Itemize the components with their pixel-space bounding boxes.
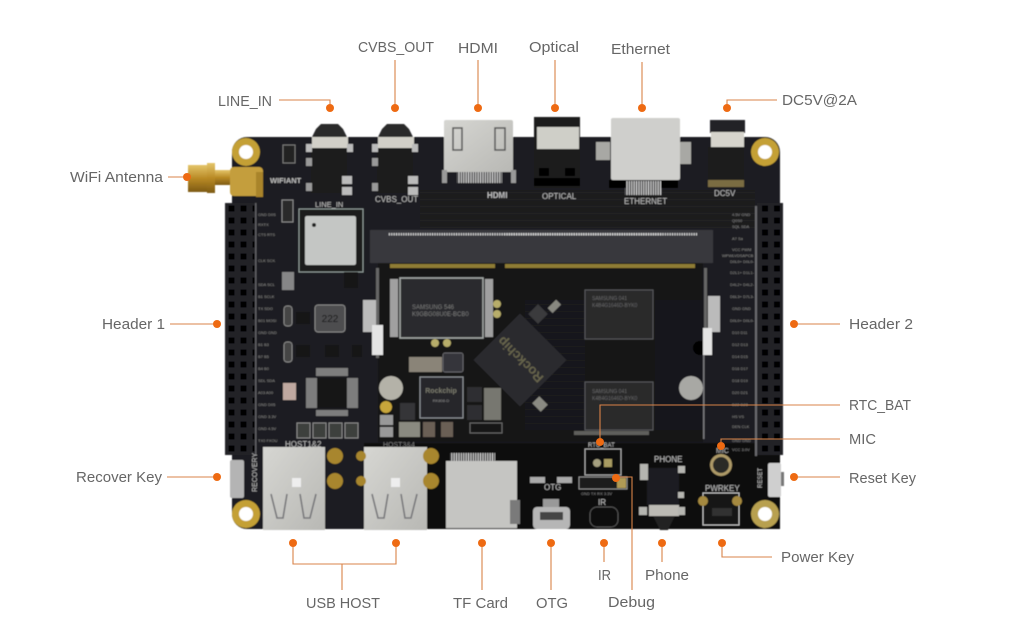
callout: Optical — [529, 39, 579, 112]
header 2 pin labels: D16 D17 — [732, 366, 749, 371]
ram chip bottom: SAMSUNG 041 — [592, 389, 627, 395]
header 2 pin labels: D6L3+ D7L3- — [730, 294, 755, 299]
callout: Recover Key: Recover Key — [76, 469, 162, 486]
usb gold pads — [327, 448, 439, 489]
left board components — [282, 145, 362, 438]
flash chip: SAMSUNG 546 — [412, 305, 455, 311]
power key button — [698, 493, 742, 525]
header 2 pin labels: SQL SDA — [732, 224, 750, 229]
mounting holes — [232, 138, 779, 528]
module retention clips — [363, 268, 720, 358]
silkscreen labels: HOST3&4 — [383, 442, 415, 449]
header 2 pin labels: D0L0+ D0L0- — [730, 318, 755, 323]
callout: HDMI — [458, 40, 498, 112]
header 2 pin labels: VCC PWM — [732, 247, 751, 252]
callout: USB HOST — [289, 539, 400, 612]
tf card slot — [446, 453, 520, 528]
silkscreen labels: WIFIANT — [270, 176, 302, 185]
ram chip bottom — [585, 382, 653, 430]
header 2 pin labels: 4.5V GND — [732, 212, 750, 217]
recover key button — [230, 460, 244, 498]
callout: TF Card — [453, 539, 508, 612]
upper board trace area — [420, 190, 755, 228]
rtc battery connector — [585, 449, 621, 475]
callout: CVBS_OUT — [358, 39, 434, 112]
header 2 pin labels: D12 D13 — [732, 342, 749, 347]
callout: Ethernet: Ethernet — [611, 41, 671, 58]
silkscreen labels: LINE_IN — [315, 200, 343, 209]
silkscreen labels: IR — [598, 498, 606, 507]
callout: Header 1: Header 1 — [102, 316, 165, 333]
callout: Header 2: Header 2 — [849, 316, 913, 333]
callout: IR: IR — [598, 567, 611, 584]
board photo — [188, 117, 784, 530]
header 1 pin labels: TX0 FXOU — [258, 438, 278, 443]
header 1 pin labels: B1 SCLK — [258, 294, 275, 299]
callout: LINE_IN — [218, 93, 334, 112]
silkscreen labels: RECOVERY — [252, 453, 259, 492]
dc power jack — [708, 120, 745, 187]
silkscreen labels: ETHERNET — [624, 197, 667, 206]
phone jack — [639, 464, 685, 530]
optical connector — [534, 117, 580, 188]
callout: DC5V@2A: DC5V@2A — [782, 92, 857, 109]
silkscreen labels: CVBS_OUT — [375, 195, 418, 204]
usb host port 2 — [364, 447, 427, 530]
callout: Header 1 — [102, 316, 221, 333]
inductor and small parts — [379, 300, 703, 437]
header 2 pin labels: D2L1+ D1L1- — [730, 270, 755, 275]
callout: Recover Key — [76, 469, 221, 486]
header 1 pin labels: A03 A00 — [258, 390, 274, 395]
header 2 pin labels: Q0S0 — [732, 218, 743, 223]
header 2 pin labels: VCC 3.0V — [732, 447, 750, 452]
debug header — [579, 477, 627, 489]
ram chip top: K4B4G1646D-BYK0 — [592, 303, 638, 309]
callout: MIC: MIC — [849, 431, 876, 448]
header 2 pin labels: GND GND — [732, 306, 751, 311]
callout: Phone: Phone — [645, 567, 689, 584]
flash chip: K9GBG08U0E-BCB0 — [412, 312, 469, 318]
flash chip — [390, 278, 493, 338]
header 2 pin labels: D18 D19 — [732, 378, 749, 383]
header 2 pin labels: DEN CLK — [732, 424, 750, 429]
callout: Power Key — [718, 539, 854, 566]
silkscreen labels: PWRKEY — [705, 484, 740, 493]
ram chip bottom: K4B4G1646D-BYK0 — [592, 396, 638, 402]
ethernet connector — [596, 118, 691, 195]
header 2 pin labels: HS VS — [732, 414, 744, 419]
cvbs out audio jack — [372, 124, 418, 195]
header 1 pin labels: GND GND — [258, 330, 277, 335]
callout: Ethernet — [611, 41, 671, 112]
callout: OTG — [536, 539, 568, 612]
lower black band — [340, 443, 780, 529]
silkscreen labels: OPTICAL — [542, 192, 577, 201]
callout: CVBS_OUT: CVBS_OUT — [358, 39, 434, 56]
power management chip: Rockchip — [425, 388, 457, 395]
callout: USB HOST: USB HOST — [306, 595, 380, 612]
header 2 pin labels: D4L2+ D4L2- — [730, 282, 755, 287]
usb host port 1 — [263, 447, 325, 530]
header 1 pin labels: SDL SDA — [258, 378, 275, 383]
silkscreen labels — [252, 176, 764, 507]
power management chip — [420, 377, 463, 418]
header 2 pin labels: D14 D15 — [732, 354, 749, 359]
header 1 pin labels: GND D0S — [258, 212, 276, 217]
header 1 pin labels: GND D05 — [258, 402, 276, 407]
callout: Header 2 — [790, 316, 913, 333]
callout: OTG: OTG — [536, 595, 568, 612]
callout: RTC_BAT: RTC_BAT — [849, 397, 911, 414]
header 1 pin labels: GND 4.5V — [258, 426, 277, 431]
header 2 pin labels: GND GND — [732, 438, 751, 443]
callout: LINE_IN: LINE_IN — [218, 93, 272, 110]
silkscreen labels: RTC_BAT — [588, 443, 615, 449]
callout: Reset Key — [790, 470, 916, 487]
header 2 pin labels — [722, 212, 755, 452]
callout: HDMI: HDMI — [458, 40, 498, 57]
callout: Reset Key: Reset Key — [849, 470, 916, 487]
callout: MIC — [717, 431, 876, 450]
callout: Power Key: Power Key — [781, 549, 854, 566]
silkscreen labels: PHONE — [654, 455, 682, 464]
silkscreen labels: MIC — [716, 448, 729, 455]
callout: Debug: Debug — [608, 594, 655, 611]
callout: RTC_BAT — [596, 397, 911, 446]
header 1 pin labels: CTS RTS — [258, 232, 275, 237]
ram chip top — [585, 290, 653, 339]
circuit board — [232, 137, 780, 529]
header 2 pins — [755, 203, 783, 456]
memory module slot — [370, 230, 713, 268]
header 1 pins — [225, 203, 256, 455]
header 1 pin labels: CLK SCK — [258, 258, 275, 263]
wifi module — [299, 209, 363, 272]
core module board — [378, 263, 704, 442]
reset key button — [768, 463, 784, 497]
rockchip processor: Rockchip — [494, 334, 546, 386]
line in audio jack — [306, 124, 353, 195]
silkscreen labels: OTG — [544, 483, 561, 492]
silkscreen labels: HOST1&2 — [285, 440, 322, 449]
header 1 pin labels: GND 3.3V — [258, 414, 277, 419]
header 1 pin labels: B4 B0 — [258, 366, 270, 371]
header 2 pin labels: D20 D21 — [732, 390, 749, 395]
header 2 pin labels: D22 D23 — [732, 402, 749, 407]
ram chip top: SAMSUNG 041 — [592, 296, 627, 302]
header 1 pin labels: B1 B3 — [258, 342, 270, 347]
callout: TF Card: TF Card — [453, 595, 508, 612]
header 2 pin labels: A7 Sa — [732, 236, 744, 241]
silkscreen labels: HDMI — [487, 191, 507, 200]
header 2 pin labels: D10 D11 — [732, 330, 748, 335]
header 1 pin labels: B01 MOSI — [258, 318, 276, 323]
callout: Optical: Optical — [529, 39, 579, 56]
callout: Debug — [608, 474, 655, 611]
left board components: 222 — [322, 314, 339, 325]
header 1 pin labels: SDA SCL — [258, 282, 276, 287]
callout: DC5V@2A — [723, 92, 857, 112]
callout: IR — [598, 539, 611, 584]
callout: WiFi Antenna: WiFi Antenna — [70, 169, 164, 186]
header 1 pin labels: TX SDO — [258, 306, 273, 311]
header 1 pin labels — [258, 212, 278, 443]
header 1 pin labels: B7 B5 — [258, 354, 270, 359]
microphone — [710, 454, 732, 476]
silkscreen labels: GND TX RX 3.3V — [581, 491, 612, 496]
wifi antenna connector — [188, 163, 263, 197]
header 2 pin labels: D0L0+ D0L0- — [730, 259, 755, 264]
otg micro usb — [530, 477, 572, 529]
silkscreen labels: DC5V — [714, 189, 736, 198]
rockchip processor — [473, 313, 567, 407]
header 2 pin labels: WPWLVDSAPCB — [722, 253, 754, 258]
silkscreen labels: RESET — [758, 468, 764, 488]
header 1 pin labels: RXTX — [258, 222, 269, 227]
ir receiver — [590, 507, 618, 527]
hdmi connector — [442, 120, 516, 183]
power management chip: RK808-D — [433, 398, 449, 403]
callout: Phone — [645, 539, 689, 584]
